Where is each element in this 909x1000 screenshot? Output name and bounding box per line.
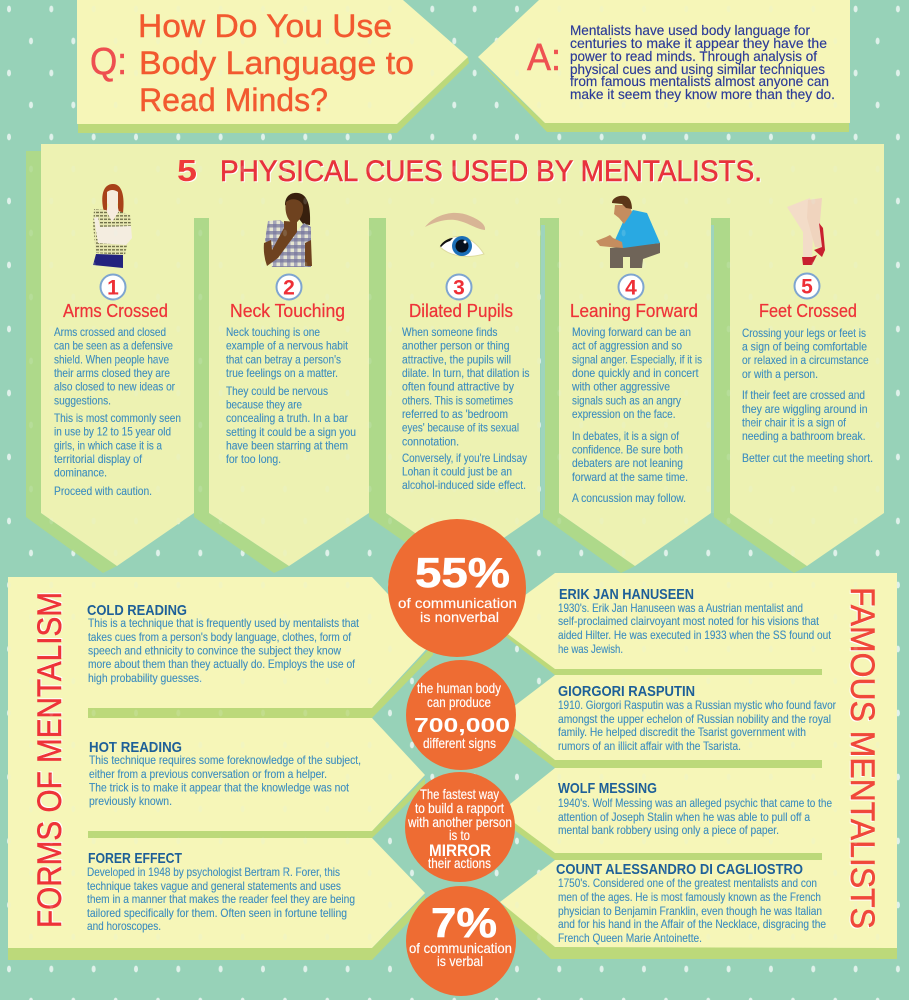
- erik jan hanuseen: ERIK JAN HANUSEEN: [559, 586, 694, 603]
- stat circle: 700,000 signs: can produce: [427, 695, 491, 710]
- wolf messing: WOLF MESSING: [558, 780, 657, 797]
- heading: Feet Crossed: [759, 300, 857, 321]
- body text: Proceed with caution.: [54, 484, 152, 498]
- body text: concealing a truth. In a bar: [226, 411, 348, 425]
- icon: man leaning forward: [596, 196, 660, 268]
- body text: connotation.: [402, 434, 459, 448]
- number badge 4: 4: [625, 276, 637, 300]
- forer effect: them in a manner that makes the reader feel they are being: [87, 892, 355, 906]
- stat circle: 55% nonverbal: is nonverbal: [420, 610, 499, 625]
- column: feet crossed: [742, 198, 873, 465]
- answer text: centuries to make it appear they have the: [570, 36, 827, 51]
- giorgori rasputin: 1910. Giorgori Rasputin was a Russian mystic who found favor: [558, 698, 836, 712]
- body text: A concussion may follow.: [572, 491, 686, 505]
- number badge 1: 1: [107, 276, 119, 300]
- erik jan hanuseen: he was Jewish.: [558, 642, 623, 656]
- cold reading: This is a technique that is frequently used by mentalists that: [88, 616, 360, 630]
- vertical heading: FAMOUS MENTALISTS: [843, 587, 881, 929]
- stat circle: mirror their actions: to build a rapport: [415, 801, 504, 816]
- body text: suggestions.: [54, 393, 111, 407]
- body text: because they are: [226, 398, 302, 412]
- count alessandro di cagliostro: COUNT ALESSANDRO DI CAGLIOSTRO: [556, 861, 803, 878]
- number badge 2: 2: [283, 276, 295, 300]
- body text: [226, 325, 356, 466]
- body text: dilate. In turn, that dilation is: [402, 366, 530, 380]
- erik jan hanuseen: aided Hilter. He was executed in 1933 when the SS found out: [558, 628, 832, 642]
- vertical heading: FORMS OF MENTALISM: [31, 592, 69, 928]
- body text: signals such as an angry: [572, 393, 681, 407]
- column: neck touching: [226, 193, 356, 466]
- column: arms crossed: [54, 184, 181, 498]
- forer effect: tailored specifically for them. Often seen in fortune telling: [87, 906, 347, 920]
- stat circle: mirror their actions: is to: [449, 828, 470, 843]
- body text: also closed to new ideas or: [54, 380, 175, 394]
- cold reading: more about them than they actually do. Employs the use of: [88, 657, 356, 671]
- answer text: physical cues and using similar techniques: [570, 62, 825, 77]
- heading: Leaning Forward: [570, 300, 698, 321]
- hot reading: The trick is to make it appear that the knowledge was not: [89, 780, 350, 794]
- body text: their arms closed they are: [54, 366, 170, 380]
- body text: When someone finds: [402, 325, 498, 339]
- body text: [54, 325, 181, 498]
- giorgori rasputin: rumors of an illicit affair with the Tsarista.: [558, 739, 741, 753]
- cold reading: takes cues from a person's body language, clothes, form of: [88, 630, 352, 644]
- body text: Lohan it could just be an: [402, 465, 512, 479]
- stat circle: 700,000 signs: the human body: [417, 681, 501, 696]
- body text: for too long.: [226, 452, 281, 466]
- number badge 2: [276, 274, 302, 300]
- body text: that can betray a person's: [226, 352, 341, 366]
- stat circle: 700,000 signs: [406, 660, 516, 770]
- count alessandro di cagliostro: 1750's. Considered one of the greatest mentalists and con: [558, 876, 817, 890]
- body text: needing a bathroom break.: [742, 429, 866, 443]
- body text: confidence. Be sure both: [572, 443, 683, 457]
- body text: Moving forward can be an: [572, 325, 691, 339]
- body text: act of aggression and so: [572, 339, 682, 353]
- number badge 3: [446, 274, 472, 300]
- count alessandro di cagliostro: French Queen Marie Antoinette.: [558, 931, 702, 945]
- number badge 5: 5: [801, 276, 813, 298]
- title: PHYSICAL CUES USED BY MENTALISTS.: [220, 155, 762, 188]
- erik jan hanuseen: self-proclaimed clairvoyant most noted for his visions that: [558, 614, 820, 628]
- panel: answer: [478, 0, 850, 132]
- column: dilated pupils: [402, 213, 530, 492]
- body text: with other aggressive: [571, 380, 670, 394]
- icon: eye and eyebrow: [425, 213, 485, 256]
- stat circle: mirror their actions: with another person: [407, 815, 512, 830]
- body text: can be seen as a defensive: [54, 339, 173, 353]
- body text: This is most commonly seen: [54, 411, 181, 425]
- body text: They could be nervous: [226, 384, 328, 398]
- question text: Body Language to: [139, 45, 414, 81]
- body text: they are wiggling around in: [742, 402, 868, 416]
- stat circle: 55% nonverbal: of communication: [398, 596, 517, 611]
- body text: If their feet are crossed and: [742, 388, 865, 402]
- body text: alcohol-induced side effect.: [402, 478, 526, 492]
- body text: dominance.: [54, 466, 107, 480]
- giorgori rasputin: family. He helped discredit the Tsarist government with: [558, 725, 806, 739]
- cold reading: COLD READING: [87, 602, 187, 619]
- body text: often found attractive by: [402, 380, 514, 394]
- hot reading: previously known.: [89, 794, 172, 808]
- answer text: from famous mentalists almost anyone can: [570, 74, 829, 89]
- panel: forms of mentalism: [8, 577, 433, 960]
- stat circle: 55% nonverbal: [388, 519, 526, 657]
- forer effect: [87, 850, 355, 933]
- body text: signal anger. Especially, if it is: [572, 352, 702, 366]
- body text: In debates, it is a sign of: [572, 429, 680, 443]
- title: 5: [177, 153, 197, 188]
- stat circle: 55% nonverbal: 55%: [415, 549, 510, 596]
- panel: question: [77, 0, 469, 133]
- giorgori rasputin: [558, 683, 836, 753]
- body text: attractive, the pupils will: [402, 352, 511, 366]
- stat circle: mirror their actions: [405, 772, 515, 882]
- number badge 3: 3: [453, 276, 465, 300]
- question text: How Do You Use: [138, 8, 392, 44]
- body text: Better cut the meeting short.: [742, 451, 873, 465]
- count alessandro di cagliostro: and for his hand in the Affair of the Necklace, disgracing the: [558, 917, 826, 931]
- body text: or relaxed in a circumstance: [742, 353, 869, 367]
- Q letter: Q:: [90, 41, 127, 83]
- forer effect: and horoscopes.: [87, 919, 161, 933]
- body text: Conversely, if you're Lindsay: [402, 451, 527, 465]
- number badge 4: [618, 274, 644, 300]
- body text: in use by 12 to 15 year old: [54, 425, 171, 439]
- giorgori rasputin: GIORGORI RASPUTIN: [558, 683, 695, 700]
- body text: debaters are not leaning: [572, 456, 683, 470]
- answer text: power to read minds. Through analysis of: [570, 49, 817, 64]
- stat circle: mirror their actions: The fastest way: [420, 787, 499, 802]
- body text: true feelings on a matter.: [226, 366, 338, 380]
- icon: woman with arms crossed: [93, 184, 132, 268]
- wolf messing: 1940's. Wolf Messing was an alleged psychic that came to the: [558, 796, 832, 810]
- count alessandro di cagliostro: [556, 861, 826, 945]
- body text: forward at the same time.: [572, 470, 688, 484]
- erik jan hanuseen: 1930's. Erik Jan Hanuseen was a Austrian mentalist and: [558, 601, 803, 615]
- wolf messing: [558, 780, 832, 837]
- body text: have been starring at them: [226, 438, 348, 452]
- stat circle: 700,000 signs: 700,000: [414, 715, 510, 737]
- body text: shield. When people have: [54, 352, 169, 366]
- answer text: make it seem they know more than they do.: [570, 87, 835, 102]
- stat circle: 7% verbal: 7%: [431, 899, 497, 946]
- hot reading: [89, 739, 361, 808]
- body text: or with a person.: [742, 367, 818, 381]
- panel: physical cues: [26, 144, 884, 573]
- cold reading: high probability guesses.: [88, 671, 202, 685]
- body text: setting it could be a sign you: [226, 425, 356, 439]
- count alessandro di cagliostro: physician to Benjamin Franklin, even though he was Italian: [558, 904, 822, 918]
- body text: [742, 326, 873, 465]
- forer effect: Developed in 1948 by psychologist Bertram R. Forer, this: [87, 865, 340, 879]
- number badge 1: [100, 274, 126, 300]
- body text: referred to as 'bedroom: [402, 407, 508, 421]
- question text: Read Minds?: [139, 82, 328, 118]
- stat circle: 7% verbal: of communication: [409, 941, 512, 956]
- body text: [571, 325, 702, 505]
- stat circle: 700,000 signs: different signs: [423, 736, 496, 751]
- cold reading: speech and ethnicity to convince the subject they know: [88, 644, 341, 658]
- body text: Arms crossed and closed: [54, 325, 166, 339]
- stat circle: mirror their actions: MIRROR: [429, 841, 491, 860]
- wolf messing: attention of Joseph Stalin when he was able to pull off a: [558, 810, 810, 824]
- answer text: [570, 23, 835, 102]
- question text: [138, 8, 414, 118]
- heading: Dilated Pupils: [409, 300, 513, 321]
- hot reading: This technique requires some foreknowledge of the subject,: [89, 753, 361, 767]
- answer text: Mentalists have used body language for: [570, 23, 810, 38]
- body text: eyes' because of its sexual: [402, 421, 519, 435]
- body text: their chair it is a sign of: [742, 416, 847, 430]
- wolf messing: mental bank robbery using only a piece of paper.: [558, 823, 779, 837]
- heading: Neck Touching: [230, 300, 345, 321]
- stat circle: 7% verbal: [406, 886, 516, 996]
- body text: example of a nervous habit: [226, 339, 349, 353]
- column: leaning forward: [570, 196, 702, 505]
- giorgori rasputin: amongst the upper echelon of Russian nobility and the royal: [558, 712, 831, 726]
- icon: woman touching neck: [264, 193, 312, 267]
- hot reading: HOT READING: [89, 739, 182, 756]
- erik jan hanuseen: [558, 586, 832, 656]
- stat circle: 7% verbal: is verbal: [437, 954, 483, 969]
- forer effect: technique takes vague and general statements and uses: [87, 879, 341, 893]
- stat circle: mirror their actions: their actions: [428, 856, 491, 871]
- cold reading: [87, 602, 360, 685]
- heading: Arms Crossed: [63, 300, 168, 321]
- body text: done quickly and in concert: [572, 366, 699, 380]
- body text: another person or thing: [402, 339, 510, 353]
- body text: others. This is sometimes: [402, 393, 513, 407]
- hot reading: either from a previous conversation or from a helper.: [89, 767, 327, 781]
- body text: expression on the face.: [572, 407, 676, 421]
- icon: crossed legs: [787, 198, 825, 265]
- body text: [402, 325, 530, 492]
- panel: famous mentalists: [490, 573, 897, 959]
- body text: Crossing your legs or feet is: [742, 326, 866, 340]
- forer effect: FORER EFFECT: [88, 850, 182, 867]
- body text: Neck touching is one: [226, 325, 320, 339]
- number badge 5: [794, 274, 820, 298]
- body text: girls, in which case it is a: [54, 438, 162, 452]
- A letter: A:: [527, 37, 561, 79]
- count alessandro di cagliostro: men of the ages. He is most famously known as the French: [558, 890, 821, 904]
- body text: a sign of being comfortable: [742, 340, 867, 354]
- body text: territorial display of: [54, 452, 143, 466]
